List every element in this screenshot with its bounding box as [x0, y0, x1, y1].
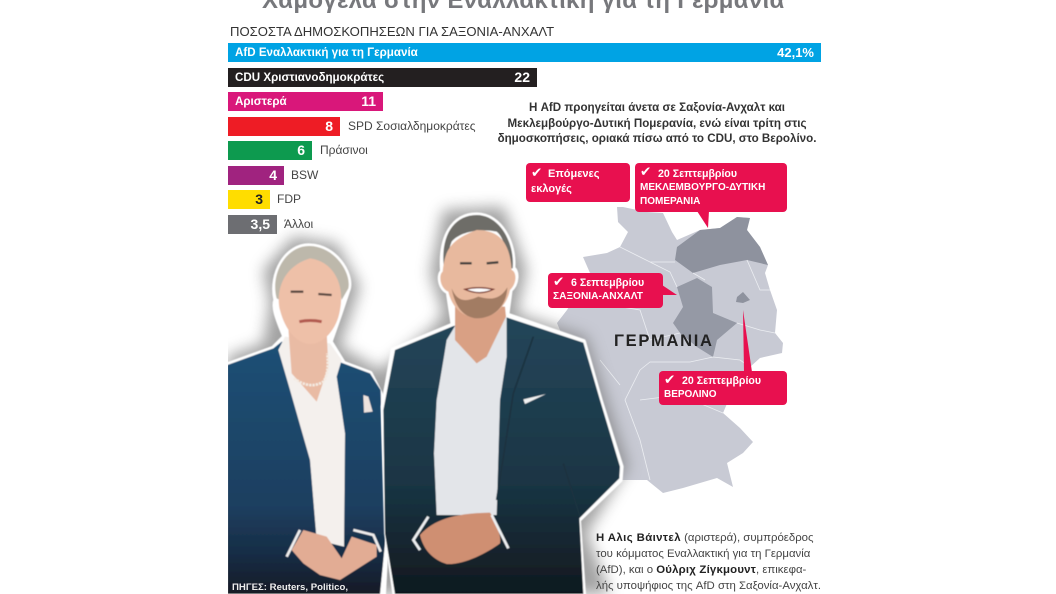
label: Others: Άλλοι: [284, 217, 313, 231]
man: beard: [452, 287, 507, 318]
map: Mecklenburg-Western Pomerania: [675, 217, 768, 273]
woman: jacket: [227, 342, 386, 594]
woman: face: [279, 258, 341, 344]
bar: AfD: 42,1%: [777, 45, 814, 60]
caption: Η Αλις Βάιντελ (αριστερά), συμπρόεδρος: [596, 532, 814, 544]
callout: Mecklenburg: [635, 163, 787, 212]
woman: neck: [288, 328, 328, 402]
callout: next elections: [526, 163, 630, 202]
callout: Mecklenburg: ΠΟΜΕΡΑΝΙΑ: [640, 196, 700, 207]
text block: summary: Η AfD προηγείται άνετα σε Σαξονία-Ανχαλτ και: [529, 101, 785, 114]
woman: outline: [227, 246, 387, 594]
woman: shirt: [278, 337, 345, 547]
halo: [227, 207, 628, 594]
callout: next elections: ✔: [531, 165, 542, 180]
bar: BSW: 4: [269, 167, 277, 183]
text block: summary: δημοσκοπήσεις, οριακά πίσω από το CDU, στο Βερολίνο.: [498, 132, 816, 145]
man: face: [440, 230, 515, 318]
bar: Greens: 6: [297, 142, 305, 158]
bar: AfD: [228, 43, 821, 62]
map: Saxony-Anhalt: [673, 278, 737, 357]
bar: Others: 3,5: [251, 216, 270, 232]
woman: hands: [292, 530, 377, 580]
man: hands: [420, 513, 500, 564]
woman: pocket square: [363, 395, 373, 413]
label: Greens: Πράσινοι: [320, 143, 368, 157]
bar: CDU: CDU Χριστιανοδημοκράτες: [235, 71, 384, 84]
bar: Left: 11: [361, 93, 376, 109]
chart heading: ΠΟΣΟΣΤΑ ΔΗΜΟΣΚΟΠΗΣΕΩΝ ΓΙΑ ΣΑΞΟΝΙΑ-ΑΝΧΑΛΤ: [230, 24, 554, 39]
man: sleeve seam: [495, 336, 534, 500]
bar: Greens: [228, 141, 312, 160]
callout: Berlin: 20 Σεπτεμβρίου: [682, 375, 761, 387]
callout: Saxony-Anhalt: ΣΑΞΟΝΙΑ-ΑΝΧΑΛΤ: [553, 291, 643, 302]
callout: Mecklenburg: ✔: [640, 164, 651, 179]
bar chart: [228, 43, 821, 234]
map label: Germany: ΓΕΡΜΑΝΙΑ: [614, 332, 714, 350]
man: shirt: [434, 317, 507, 515]
bar: Others: [228, 215, 277, 234]
callout: Saxony-Anhalt: 6 Σεπτεμβρίου: [571, 277, 644, 289]
bar: CDU: 22: [514, 69, 530, 85]
woman: [227, 246, 387, 594]
man: pocket square: [523, 394, 546, 404]
text block: summary: [498, 101, 816, 145]
caption: του κόμματος Εναλλακτική για τη Γερμανία: [596, 548, 810, 560]
callout: Berlin: ΒΕΡΟΛΙΝΟ: [664, 389, 717, 400]
caption: [596, 532, 821, 592]
woman: hair: [275, 246, 349, 300]
woman: cuffs: [287, 530, 381, 557]
bar: Left: [228, 92, 383, 111]
label: SPD: SPD Σοσιαλδημοκράτες: [348, 119, 476, 133]
caption: λής υποψήφιος της AfD στη Σαξονία-Ανχαλτ.: [596, 580, 821, 592]
man: outline: [383, 215, 621, 594]
bar: SPD: [228, 117, 340, 136]
callout: Saxony-Anhalt: ✔: [553, 274, 564, 289]
bar: AfD: AfD Εναλλακτική για τη Γερμανία: [235, 46, 418, 59]
caption: (AfD), και ο Ούλριχ Ζίγκμουντ, επικεφα-: [596, 564, 806, 576]
bar: CDU: [228, 68, 537, 87]
man: cuffs: [413, 515, 508, 550]
callout: next elections: Επόμενες: [548, 168, 600, 180]
callout: Berlin: [659, 371, 787, 405]
label: FDP: FDP: [277, 192, 301, 206]
source note: ΠΗΓΕΣ: Reuters, Politico,: [232, 582, 348, 593]
label: BSW: BSW: [291, 168, 318, 182]
bar: BSW: [228, 166, 284, 185]
callout: Mecklenburg: 20 Σεπτεμβρίου: [658, 168, 737, 180]
woman: eyes and mouth: [291, 292, 332, 295]
callout: Berlin: ✔: [664, 372, 675, 387]
photo: Alice Weidel and Ulrich Siegmund: [228, 198, 634, 594]
callout: next elections: εκλογές: [531, 183, 572, 195]
callout: Saxony-Anhalt: [548, 273, 663, 308]
man: smile: [465, 288, 493, 293]
text block: summary: Μεκλεμβούργο-Δυτική Πομερανία, ενώ είναι τρίτη στις: [507, 116, 807, 130]
bar: SPD: 8: [325, 118, 333, 134]
callout: Mecklenburg: ΜΕΚΛΕΜΒΟΥΡΓΟ-ΔΥΤΙΚΗ: [640, 182, 765, 193]
man: jacket: [383, 317, 620, 594]
map: state borders: [590, 247, 775, 480]
bar: Left: Αριστερά: [235, 95, 287, 108]
man: [383, 215, 621, 594]
map outline: [557, 207, 783, 493]
man: hair: [443, 215, 513, 268]
bar: FDP: [228, 190, 270, 209]
man: neck: [455, 307, 506, 363]
map: Berlin: [736, 292, 750, 303]
man: eyes: [460, 262, 498, 263]
woman: necklace: [294, 353, 328, 385]
bar: FDP: 3: [255, 191, 263, 207]
